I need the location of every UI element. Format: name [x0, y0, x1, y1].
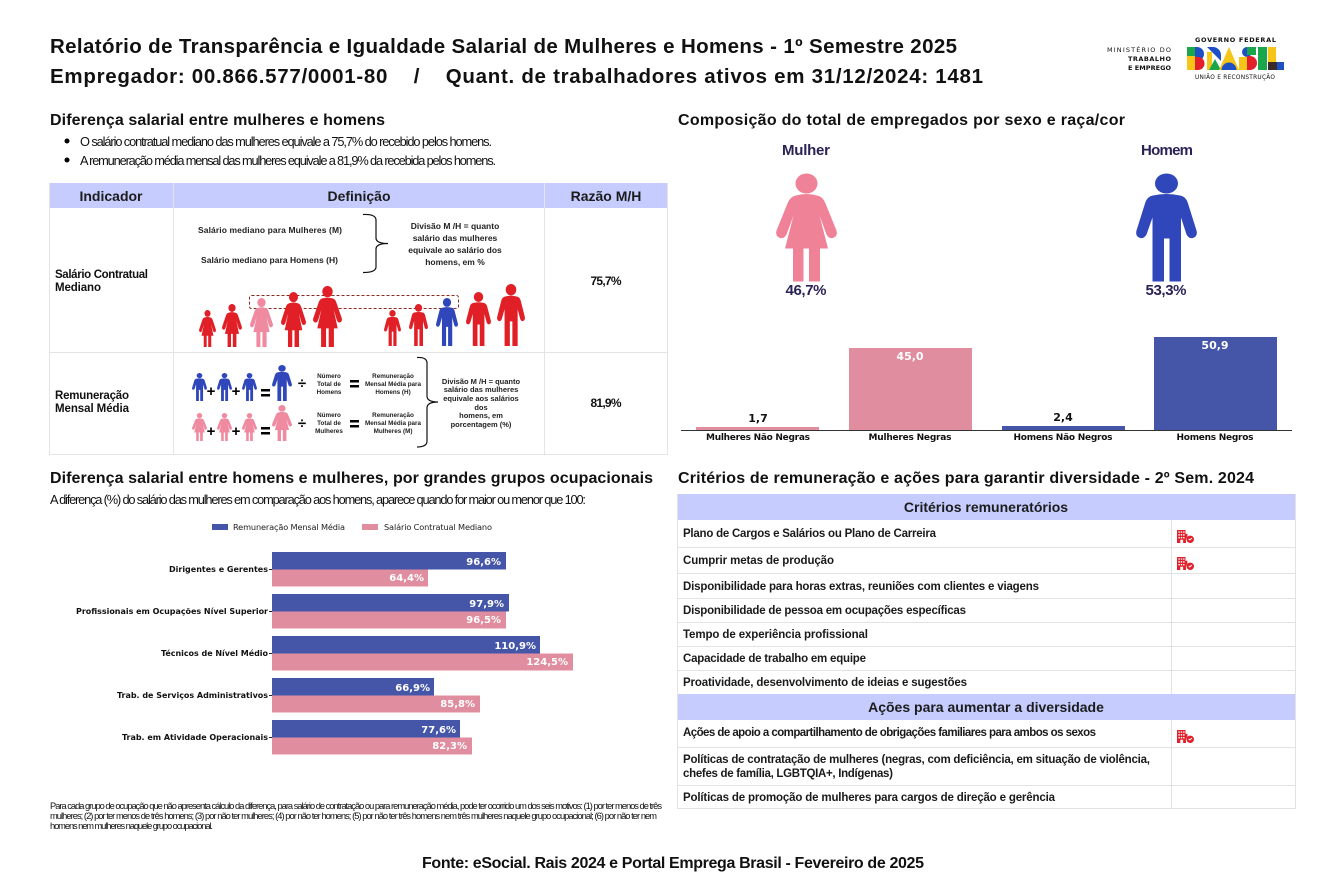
definition: divisão M/H: Divisão M /H = quanto: [442, 377, 520, 386]
definition: remuneração média homens: Mensal Média para: [365, 381, 421, 388]
bullet list: A remuneração média mensal das mulheres equivale a 81,9% da recebida pelos homens.: [80, 153, 496, 168]
definition: remuneração média mulheres: Mensal Média para: [365, 420, 421, 427]
definition: remuneração média homens: Remuneração: [372, 373, 414, 380]
legend: [212, 522, 492, 532]
icon: empresa com ação: [1177, 730, 1194, 743]
group: técnicos: 124,5%: [526, 657, 568, 668]
section: ações para aumentar a diversidade: Políticas de promoção de mulheres para cargos de direção e gerência: [683, 792, 1056, 804]
title: [50, 35, 983, 88]
definition: remuneração média mulheres: Mulheres: [315, 428, 343, 435]
group: atividade operacional: [122, 720, 472, 754]
table header: Indicador: [79, 188, 143, 204]
bar chart: raça/cor: [681, 337, 1292, 443]
heading: diferença salarial: Diferença salarial entre mulheres e homens: [50, 112, 385, 129]
bar chart: raça/cor: Mulheres Não Negras: [706, 433, 810, 443]
figure: homem: Homem: [1141, 142, 1193, 159]
legend: Salário Contratual Mediano: [384, 522, 492, 532]
bar chart: raça/cor: Mulheres Negras: [868, 433, 952, 443]
bar chart: grupos ocupacionais: [76, 552, 573, 754]
section: ações para aumentar a diversidade: Políticas de contratação de mulheres (negras, com deficiência, em situação de violência,: [683, 754, 1150, 766]
definition: remuneração média mulheres: +: [232, 423, 241, 440]
group: profissionais: [76, 594, 509, 628]
bar chart: raça/cor: Homens Não Negros: [1014, 433, 1112, 443]
definition: remuneração média homens: Número: [317, 373, 341, 380]
figure: mulher: [776, 142, 837, 299]
section: critérios remuneratórios: Critérios remuneratórios: [904, 499, 1068, 515]
definition: remuneração média homens: Total de: [317, 381, 341, 388]
definition: remuneração média homens: Homens: [317, 389, 342, 396]
title: Empregador: 00.866.577/0001-80 / Quant. de trabalhadores ativos em 31/12/2024: 1481: [50, 65, 983, 88]
definition: remuneração média mulheres: ÷: [298, 415, 306, 432]
figure: mulher: 46,7%: [786, 282, 826, 299]
definition: divisão M/H: dos: [474, 403, 488, 412]
section: critérios remuneratórios: Proatividade, desenvolvimento de ideias e sugestões: [683, 677, 967, 689]
heading: composição: Composição do total de empregados por sexo e raça/cor: [678, 112, 1125, 129]
section: critérios remuneratórios: Tempo de experiência profissional: [683, 629, 868, 641]
logo: ministério e governo federal: UNIÃO E RECONSTRUÇÃO: [1195, 74, 1275, 81]
group: dirigentes e gerentes: 64,4%: [389, 573, 424, 584]
bar chart: raça/cor: Homens Negros: [1176, 433, 1254, 443]
definition: remuneração média mulheres: Mulheres (M): [374, 428, 412, 435]
definition: remuneração média homens: +: [207, 383, 216, 400]
legend: Remuneração Mensal Média: [233, 522, 345, 532]
definition: salário mediano: Salário mediano para Homens (H): [201, 255, 338, 265]
group: dirigentes e gerentes: 96,6%: [466, 557, 501, 568]
definition: remuneração média homens: ÷: [298, 375, 306, 392]
definition: salário mediano: Divisão M /H = quanto: [411, 221, 499, 231]
definition: salário mediano: Salário mediano para Mulheres (M): [198, 225, 342, 235]
bar chart: raça/cor: 50,9: [1201, 339, 1229, 352]
footnote: mulheres; (2) por ter menos de três homens; (3) por não ter mulheres; (4) por não ter homens; (5) por não ter três homens nem três mulheres naquele grupo ocupacional; (6) por não ter nem: [50, 811, 657, 821]
footnote: Para cada grupo de ocupação que não apresenta cálculo da diferença, para salário de contratação ou para remuneração média, pode ter ocorrido um dos seis motivos: (1) por ter menos de três: [50, 801, 662, 811]
definition: remuneração média mulheres: Remuneração: [372, 412, 414, 419]
group: técnicos: Técnicos de Nível Médio: [161, 648, 268, 658]
group: serviços administrativos: 85,8%: [440, 699, 475, 710]
section: ações para aumentar a diversidade: [683, 699, 1150, 804]
section: critérios remuneratórios: [683, 499, 1068, 689]
definition: salário mediano: homens, em %: [425, 257, 485, 267]
bullet list: [64, 134, 496, 168]
definition: divisão M/H: homens, em: [459, 411, 503, 420]
row: remuneração mensal média: Remuneração: [55, 390, 129, 402]
table header: Definição: [327, 188, 391, 204]
definition: remuneração média mulheres: Total de: [317, 420, 341, 427]
group: serviços administrativos: [117, 678, 480, 712]
bullet list: O salário contratual mediano das mulheres equivale a 75,7% do recebido pelos homens.: [80, 134, 492, 149]
group: técnicos: 110,9%: [494, 641, 536, 652]
row: salário contratual mediano: [55, 269, 622, 294]
icons: mediana com mulheres e homens: [199, 284, 525, 347]
section: ações para aumentar a diversidade: chefes de família, LGBTQIA+, Indígenas): [683, 768, 893, 780]
definition: salário mediano: [198, 214, 502, 272]
logo: ministério e governo federal: TRABALHO: [1128, 55, 1171, 63]
group: técnicos: [161, 636, 573, 670]
section: critérios remuneratórios: Disponibilidade de pessoa em ocupações específicas: [683, 605, 966, 617]
section: ações para aumentar a diversidade: Ações de apoio a compartilhamento de obrigações familiares para ambos os sexos: [683, 727, 1096, 739]
definition: salário mediano: equivale ao salário dos: [408, 245, 502, 255]
heading: critérios: Critérios de remuneração e ações para garantir diversidade - 2º Sem. 2024: [678, 470, 1254, 487]
logo: ministério e governo federal: GOVERNO FEDERAL: [1195, 36, 1276, 44]
definition: salário mediano: salário das mulheres: [413, 233, 498, 243]
subtitle: grupos ocupacionais: A diferença (%) do salário das mulheres em comparação aos homens, aparece quando for maior ou menor que 100:: [50, 492, 586, 507]
definition: divisão M/H: equivale aos salários: [443, 394, 519, 403]
section: critérios remuneratórios: Disponibilidade para horas extras, reuniões com clientes e viagens: [683, 581, 1039, 593]
definition: divisão M/H: salário das mulheres: [444, 385, 518, 394]
group: atividade operacional: 77,6%: [421, 725, 456, 736]
group: profissionais: 97,9%: [469, 599, 504, 610]
section: ações para aumentar a diversidade: Ações para aumentar a diversidade: [868, 699, 1104, 715]
row: salário contratual mediano: Salário Contratual: [55, 269, 148, 281]
logo: ministério e governo federal: MINISTÉRIO DO: [1107, 45, 1171, 54]
row: remuneração mensal média: 81,9%: [590, 396, 622, 410]
source: Fonte: eSocial. Rais 2024 e Portal Emprega Brasil - Fevereiro de 2025: [422, 855, 924, 872]
definition: remuneração média mulheres: [192, 405, 421, 441]
definition: divisão M/H: porcentagem (%): [451, 420, 512, 429]
definition: remuneração média homens: [192, 365, 421, 401]
definition: remuneração média homens: +: [232, 383, 241, 400]
heading: grupos ocupacionais: Diferença salarial entre homens e mulheres, por grandes grupos ocupacionais: [50, 470, 653, 487]
figure: homem: [1136, 142, 1197, 299]
group: serviços administrativos: 66,9%: [395, 683, 430, 694]
definition: divisão M/H: [417, 357, 520, 447]
bar chart: raça/cor: 1,7: [748, 412, 768, 425]
section: critérios remuneratórios: Capacidade de trabalho em equipe: [683, 653, 866, 665]
row: salário contratual mediano: Mediano: [55, 282, 101, 294]
icon: empresa com critério 2: [1177, 557, 1194, 570]
row: remuneração mensal média: Mensal Média: [55, 403, 130, 415]
group: serviços administrativos: Trab. de Serviços Administrativos: [117, 691, 268, 700]
bar chart: raça/cor: 45,0: [896, 350, 924, 363]
bar chart: raça/cor: 2,4: [1053, 411, 1073, 424]
title: Relatório de Transparência e Igualdade Salarial de Mulheres e Homens - 1º Semestre 2025: [50, 35, 957, 58]
section: critérios remuneratórios: Plano de Cargos e Salários ou Plano de Carreira: [683, 528, 937, 540]
figure: homem: 53,3%: [1146, 282, 1186, 299]
group: dirigentes e gerentes: Dirigentes e Gerentes: [169, 565, 268, 574]
group: dirigentes e gerentes: [169, 552, 506, 586]
definition: remuneração média mulheres: +: [207, 423, 216, 440]
group: atividade operacional: 82,3%: [432, 741, 467, 752]
logo: ministério e governo federal: [1107, 36, 1284, 81]
icon: empresa com critério 1: [1177, 530, 1194, 543]
figure: mulher: Mulher: [782, 142, 830, 159]
definition: remuneração média homens: Homens (H): [375, 389, 411, 396]
table header: Razão M/H: [571, 188, 641, 204]
section: critérios remuneratórios: Cumprir metas de produção: [683, 555, 834, 567]
row: remuneração mensal média: [55, 390, 622, 415]
footnote: homens nem mulheres naquele grupo ocupacional.: [50, 821, 213, 831]
definition: remuneração média mulheres: Número: [317, 412, 341, 419]
table header: [79, 188, 641, 204]
panel: tabela de critérios: [677, 494, 1296, 809]
logo: ministério e governo federal: E EMPREGO: [1128, 64, 1171, 72]
group: atividade operacional: Trab. em Atividade Operacionais: [122, 733, 268, 742]
group: profissionais: 96,5%: [466, 615, 501, 626]
row: salário contratual mediano: 75,7%: [590, 274, 622, 288]
footnote: [50, 801, 662, 831]
panel: tabela de indicadores: [50, 183, 668, 455]
group: profissionais: Profissionais em Ocupações Nível Superior: [76, 607, 268, 616]
